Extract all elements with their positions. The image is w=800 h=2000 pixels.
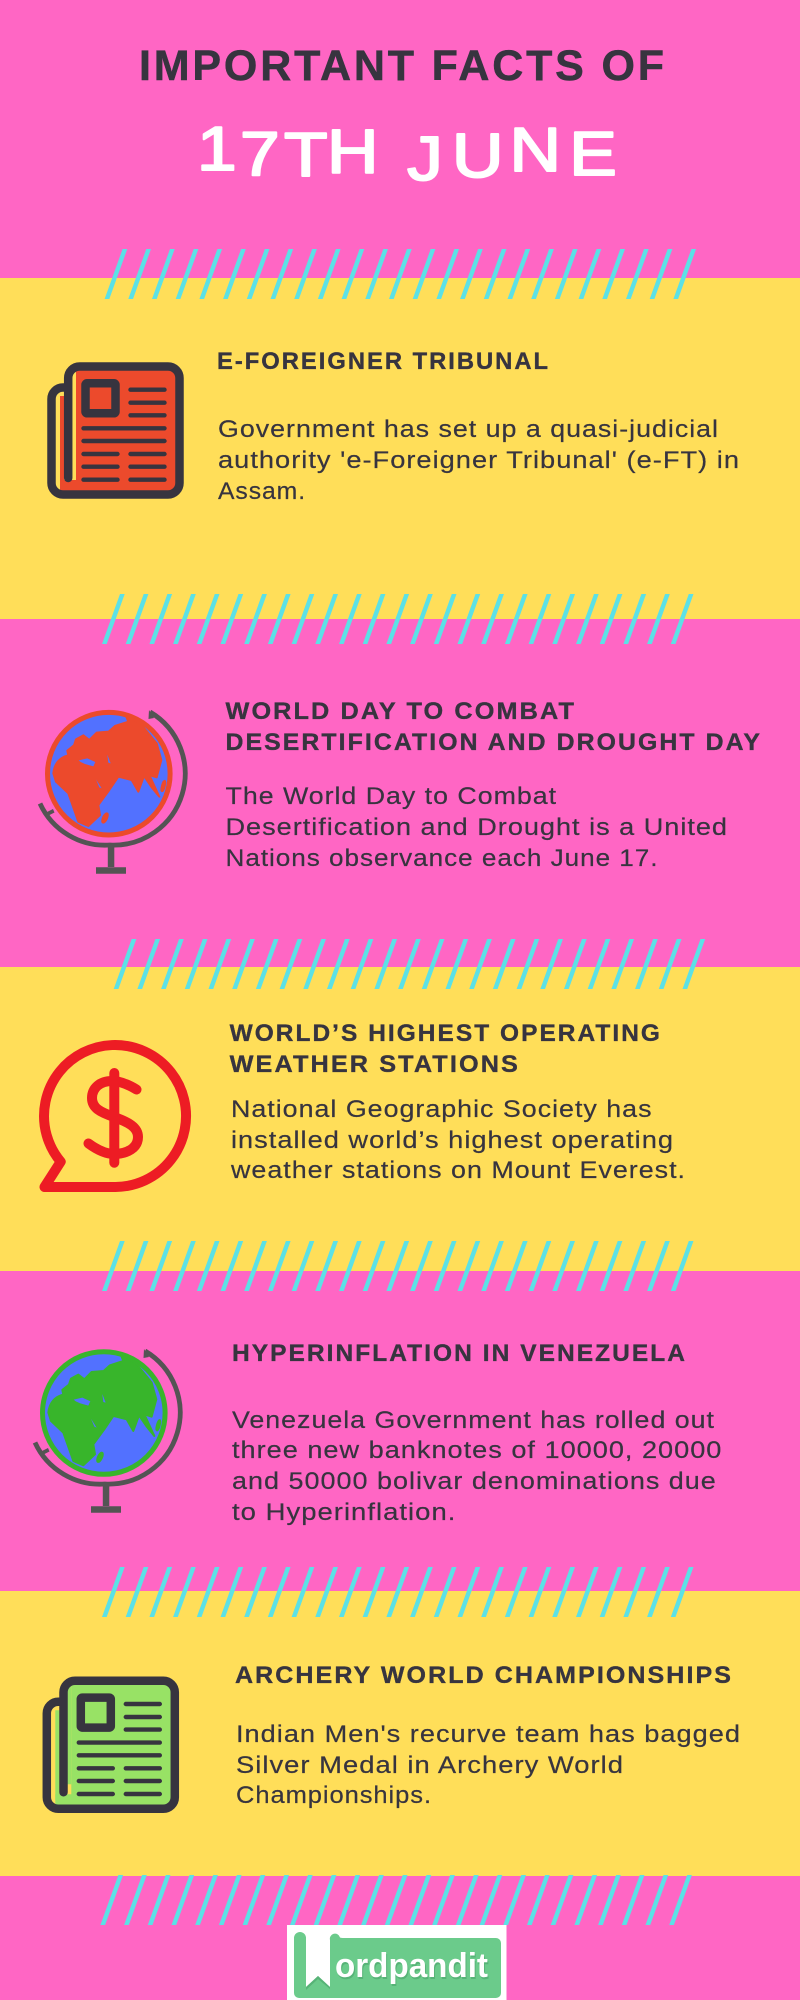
icon: green newspaper: [47, 1681, 175, 1809]
panel: world's highest operating weather stations: [44, 1020, 686, 1187]
heading: WORLD DAY TO COMBAT: [226, 698, 576, 725]
body text: [236, 1721, 741, 1809]
panel: e-foreigner tribunal: [52, 348, 740, 505]
panel: archery world championships: [47, 1662, 741, 1809]
body text: Desertification and Drought is a United: [226, 814, 728, 841]
panel: world day to combat desertification: [40, 698, 762, 874]
body text: [230, 1096, 686, 1184]
body text: authority 'e-Foreigner Tribunal' (e-FT) in: [218, 447, 740, 474]
heading: [230, 1020, 662, 1078]
title: [139, 42, 664, 194]
panel: hyperinflation in venezuela: [35, 1340, 722, 1526]
logo wordmark: ordpandit: [335, 1947, 488, 1985]
title line: important facts: IMPORTANT FACTS OF: [139, 42, 664, 90]
heading: ARCHERY WORLD CHAMPIONSHIPS: [235, 1662, 733, 1689]
heading: WEATHER STATIONS: [230, 1051, 520, 1078]
heading: WORLD’S HIGHEST OPERATING: [230, 1020, 662, 1047]
body text: and 50000 bolivar denominations due: [232, 1468, 717, 1495]
heading: E-FOREIGNER TRIBUNAL: [217, 348, 550, 375]
body text: three new banknotes of 10000, 20000: [232, 1437, 722, 1464]
heading: HYPERINFLATION IN VENEZUELA: [232, 1340, 687, 1367]
body text: Assam.: [218, 478, 306, 505]
body text: Championships.: [236, 1782, 432, 1809]
body text: The World Day to Combat: [226, 783, 557, 810]
body text: to Hyperinflation.: [232, 1499, 456, 1526]
icon: orange newspaper: [52, 366, 180, 494]
heading: [226, 698, 762, 756]
body text: [226, 783, 728, 872]
logo: wordpandit: [287, 1925, 506, 2000]
body text: [218, 416, 740, 505]
heading: DESERTIFICATION AND DROUGHT DAY: [226, 729, 762, 756]
body text: Indian Men's recurve team has bagged: [236, 1721, 741, 1748]
body text: Government has set up a quasi-judicial: [218, 416, 719, 443]
body text: National Geographic Society has: [231, 1096, 652, 1123]
body text: weather stations on Mount Everest.: [230, 1157, 686, 1184]
icon: red globe: [40, 710, 185, 874]
icon: red dollar speech bubble: [44, 1045, 186, 1187]
body text: installed world’s highest operating: [231, 1127, 674, 1154]
body text: Venezuela Government has rolled out: [232, 1407, 715, 1434]
body text: Silver Medal in Archery World: [236, 1752, 624, 1779]
body text: Nations observance each June 17.: [226, 845, 658, 872]
body text: [232, 1407, 722, 1526]
title line: date: 17TH JUNE: [197, 115, 617, 194]
icon: green globe: [35, 1349, 180, 1513]
